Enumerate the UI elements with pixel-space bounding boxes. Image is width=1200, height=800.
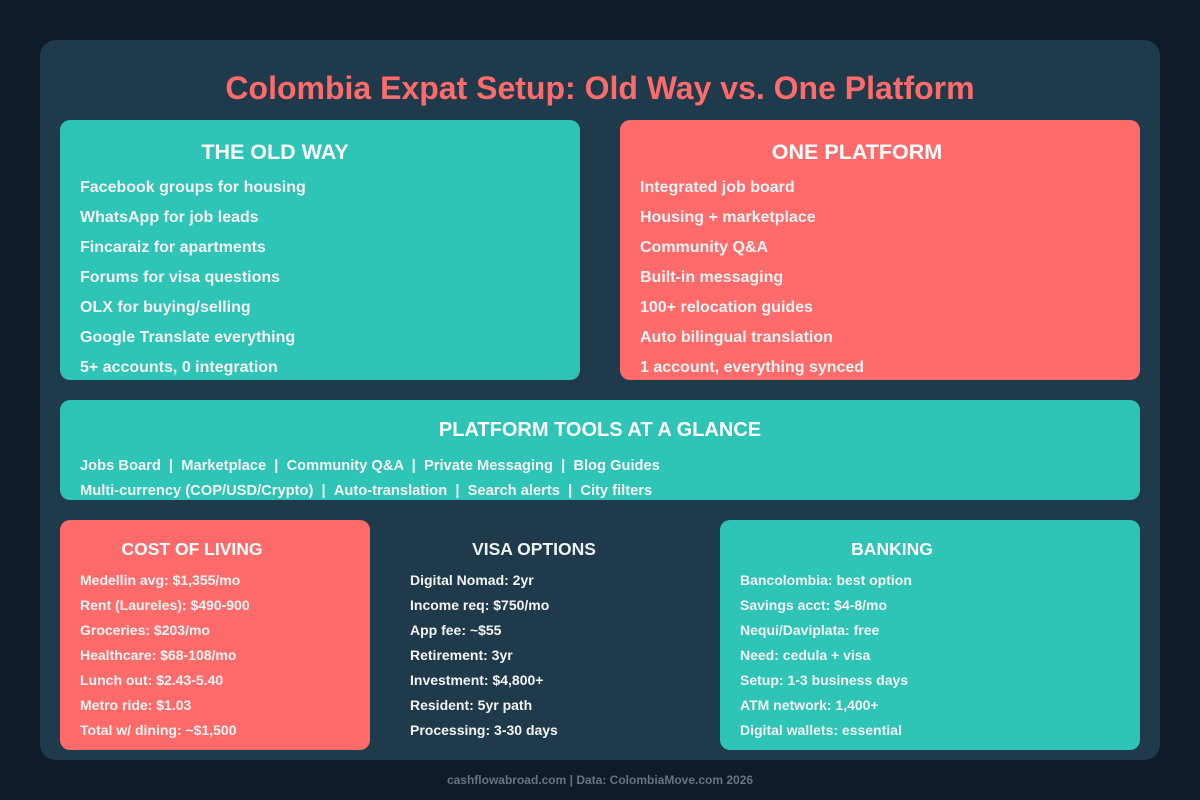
list: visas: Resident: 5yr path [410, 697, 532, 713]
list: banking: Nequi/Daviplata: free [740, 622, 879, 638]
list: old way items: 5+ accounts, 0 integration [80, 359, 278, 376]
list: one platform items: 1 account, everything synced [640, 359, 864, 376]
title: Colombia Expat Setup: Old Way vs. One Platform [225, 70, 975, 106]
list: old way items: Google Translate everything [80, 329, 295, 346]
list: costs: Metro ride: $1.03 [80, 697, 191, 713]
list: visas: Income req: $750/mo [410, 597, 549, 613]
list: costs: Healthcare: $68-108/mo [80, 647, 236, 663]
panel: the old way [60, 120, 580, 380]
list: costs: Lunch out: $2.43-5.40 [80, 672, 223, 688]
list: visas: Retirement: 3yr [410, 647, 513, 663]
list: visas [410, 572, 558, 738]
heading: one platform: ONE PLATFORM [772, 140, 942, 164]
panel: one platform [620, 120, 1140, 380]
panel: banking [720, 520, 1140, 750]
list: one platform items: Community Q&A [640, 239, 768, 256]
heading: banking: BANKING [851, 539, 933, 559]
list: banking [740, 572, 912, 738]
list: visas: Investment: $4,800+ [410, 672, 543, 688]
text: tools list: Jobs Board | Marketplace | Community Q&A | Private Messaging | Blog Guides [80, 458, 660, 474]
list: old way items [80, 179, 306, 376]
list: costs: Medellin avg: $1,355/mo [80, 572, 240, 588]
list: visas: App fee: ~$55 [410, 622, 501, 638]
list: banking: Bancolombia: best option [740, 572, 912, 588]
text: tools list: Multi-currency (COP/USD/Crypto) | Auto-translation | Search alerts | City filters [80, 483, 652, 499]
heading: platform tools: PLATFORM TOOLS AT A GLANCE [439, 419, 761, 441]
panel: cost of living [60, 520, 370, 750]
list: costs [80, 572, 250, 738]
list: costs: Total w/ dining: ~$1,500 [80, 722, 236, 738]
list: old way items: WhatsApp for job leads [80, 209, 259, 226]
list: banking: Setup: 1-3 business days [740, 672, 908, 688]
heading: cost of living: COST OF LIVING [122, 539, 262, 559]
list: old way items: Fincaraiz for apartments [80, 239, 266, 256]
text: tools list [80, 458, 660, 499]
list: banking: Savings acct: $4-8/mo [740, 597, 887, 613]
list: banking: Digital wallets: essential [740, 722, 902, 738]
heading: the old way: THE OLD WAY [201, 140, 349, 164]
footer: cashflowabroad.com | Data: ColombiaMove.com 2026 [447, 773, 753, 787]
list: one platform items: Housing + marketplace [640, 209, 816, 226]
list: one platform items: Auto bilingual translation [640, 329, 833, 346]
list: one platform items: Integrated job board [640, 179, 795, 196]
list: visas: Digital Nomad: 2yr [410, 572, 534, 588]
list: old way items: Forums for visa questions [80, 269, 280, 286]
list: costs: Groceries: $203/mo [80, 622, 210, 638]
list: one platform items: 100+ relocation guides [640, 299, 813, 316]
list: banking: ATM network: 1,400+ [740, 697, 879, 713]
list: visas: Processing: 3-30 days [410, 722, 558, 738]
list: old way items: Facebook groups for housing [80, 179, 306, 196]
list: costs: Rent (Laureles): $490-900 [80, 597, 250, 613]
heading: visa options: VISA OPTIONS [472, 539, 596, 559]
list: one platform items [640, 179, 864, 376]
list: banking: Need: cedula + visa [740, 647, 870, 663]
list: one platform items: Built-in messaging [640, 269, 783, 286]
list: old way items: OLX for buying/selling [80, 299, 251, 316]
panel: platform tools [60, 400, 1140, 500]
panel: visa options [410, 539, 596, 738]
